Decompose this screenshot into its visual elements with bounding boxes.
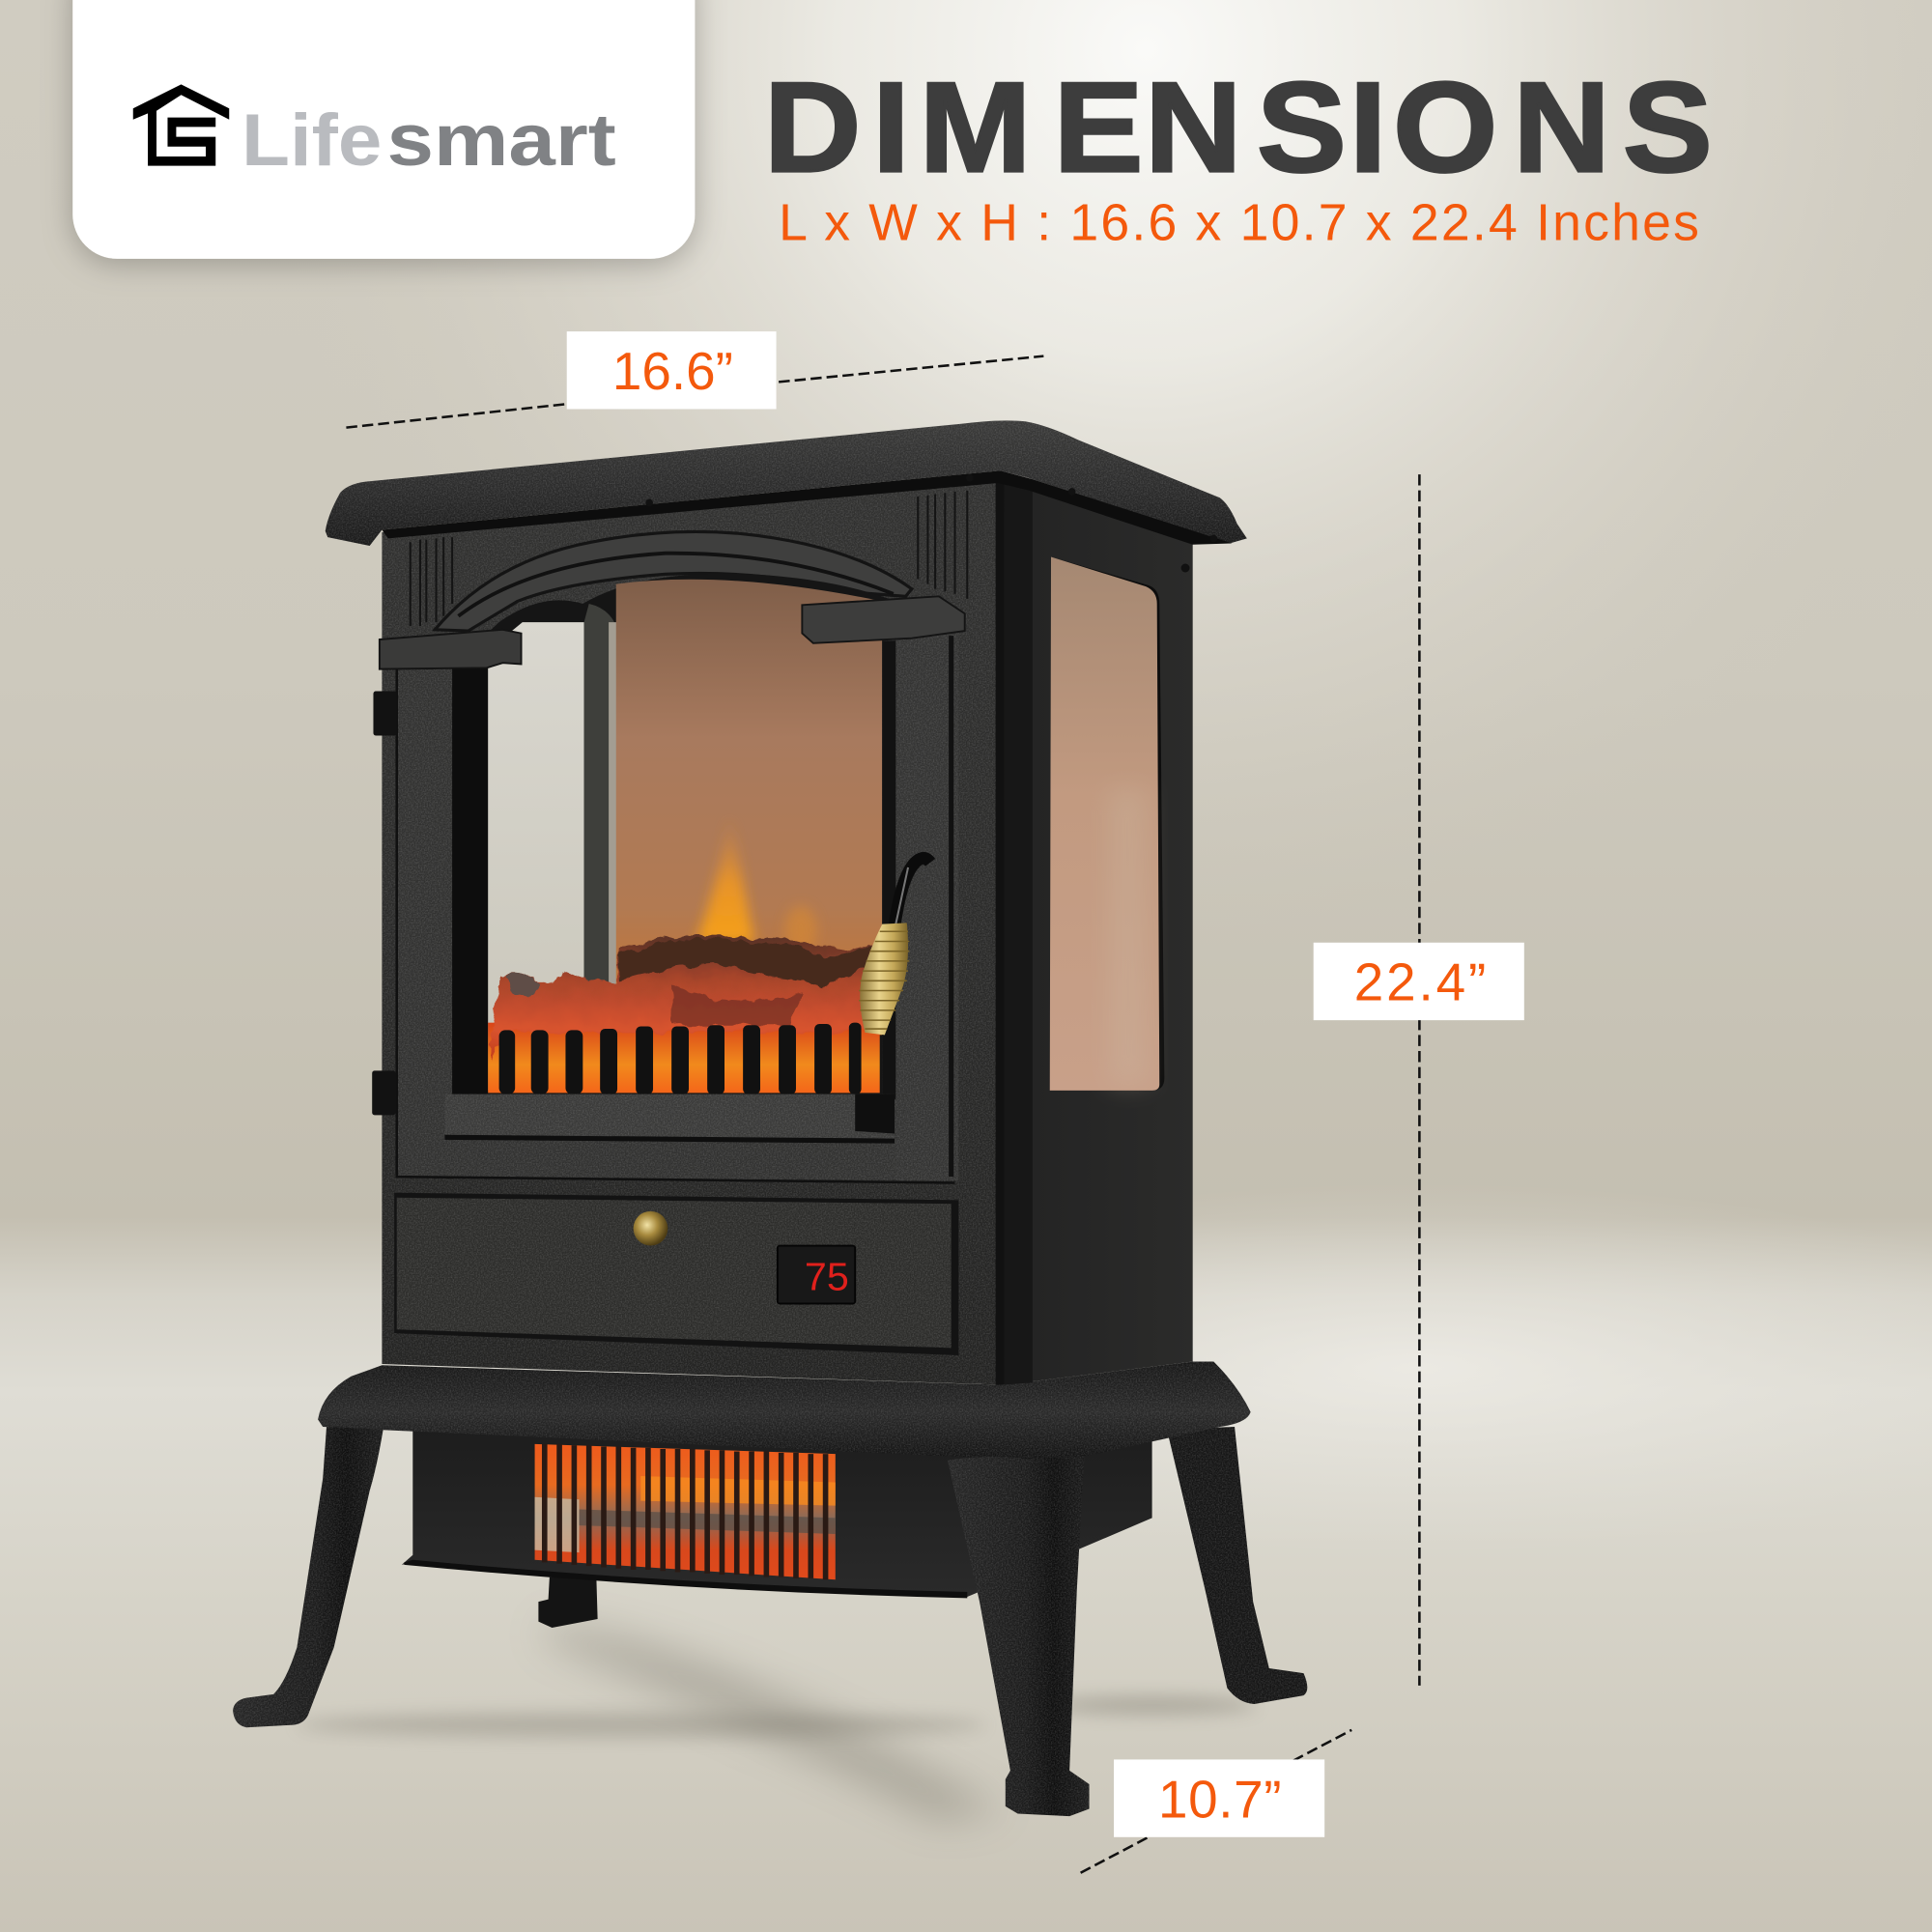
logo card xyxy=(72,0,695,259)
logo wordmark: smart xyxy=(387,99,616,182)
logs xyxy=(491,936,877,1060)
logo wordmark: Life xyxy=(242,99,382,182)
dimension label: depth: 10.7” xyxy=(1158,1769,1282,1829)
side window xyxy=(1050,557,1164,1091)
temperature display: 75 xyxy=(805,1254,849,1298)
dimension guide: width xyxy=(346,356,1043,428)
pilaster grooves xyxy=(411,491,967,626)
temperature display xyxy=(778,1246,855,1303)
stove lid xyxy=(326,420,1247,572)
drawer knob xyxy=(634,1211,668,1246)
rear right leg xyxy=(1167,1427,1307,1704)
left capital xyxy=(380,630,522,669)
dimension label: width: 16.6” xyxy=(612,341,733,401)
door lower frame and left pillar xyxy=(397,666,955,1180)
dimension guide: depth xyxy=(1081,1730,1351,1873)
icon: house logo xyxy=(133,84,229,166)
firebox background xyxy=(453,574,895,1096)
right capital xyxy=(802,596,965,643)
logo wordmark xyxy=(242,99,616,182)
ledge xyxy=(444,1094,895,1144)
dimension label: depth xyxy=(1114,1759,1324,1837)
stove cabinet xyxy=(372,475,1193,1385)
glowing fire bed xyxy=(488,1023,880,1093)
heater box xyxy=(402,1430,1152,1597)
dimension label: height: 22.4” xyxy=(1354,952,1486,1012)
drawer panel xyxy=(394,1193,958,1355)
arch surround xyxy=(435,531,912,631)
rear centre foot xyxy=(538,1577,598,1628)
right door pillar xyxy=(882,634,958,1180)
electric stove heater xyxy=(233,420,1307,1816)
central glass divider xyxy=(584,604,620,985)
dimension guide: height xyxy=(1418,474,1420,1686)
door outline xyxy=(397,666,955,1182)
floor shadows under heater xyxy=(296,1624,1257,1821)
inner left pillar shadow xyxy=(452,663,488,1094)
cabinet side xyxy=(1005,478,1193,1385)
base plinth xyxy=(318,1361,1251,1462)
left see-through window xyxy=(488,622,584,1091)
cabinet corner xyxy=(1005,478,1033,1385)
front left leg xyxy=(233,1427,384,1727)
title: DIMENSIONS xyxy=(764,55,1713,199)
infrared heater grill xyxy=(535,1444,836,1579)
hinges xyxy=(372,692,397,1115)
subtitle: overall dimensions: L x W x H : 16.6 x 10.7 x 22.4 Inches xyxy=(779,195,1699,252)
handle with gold spring xyxy=(859,858,930,1035)
fire grate bars xyxy=(499,1023,862,1094)
cabinet front xyxy=(382,475,1005,1385)
flame back panel xyxy=(616,580,882,1035)
dimension label: height xyxy=(1314,943,1524,1020)
dimension label: width xyxy=(567,331,777,409)
front right leg xyxy=(948,1457,1090,1816)
flames xyxy=(696,813,817,955)
